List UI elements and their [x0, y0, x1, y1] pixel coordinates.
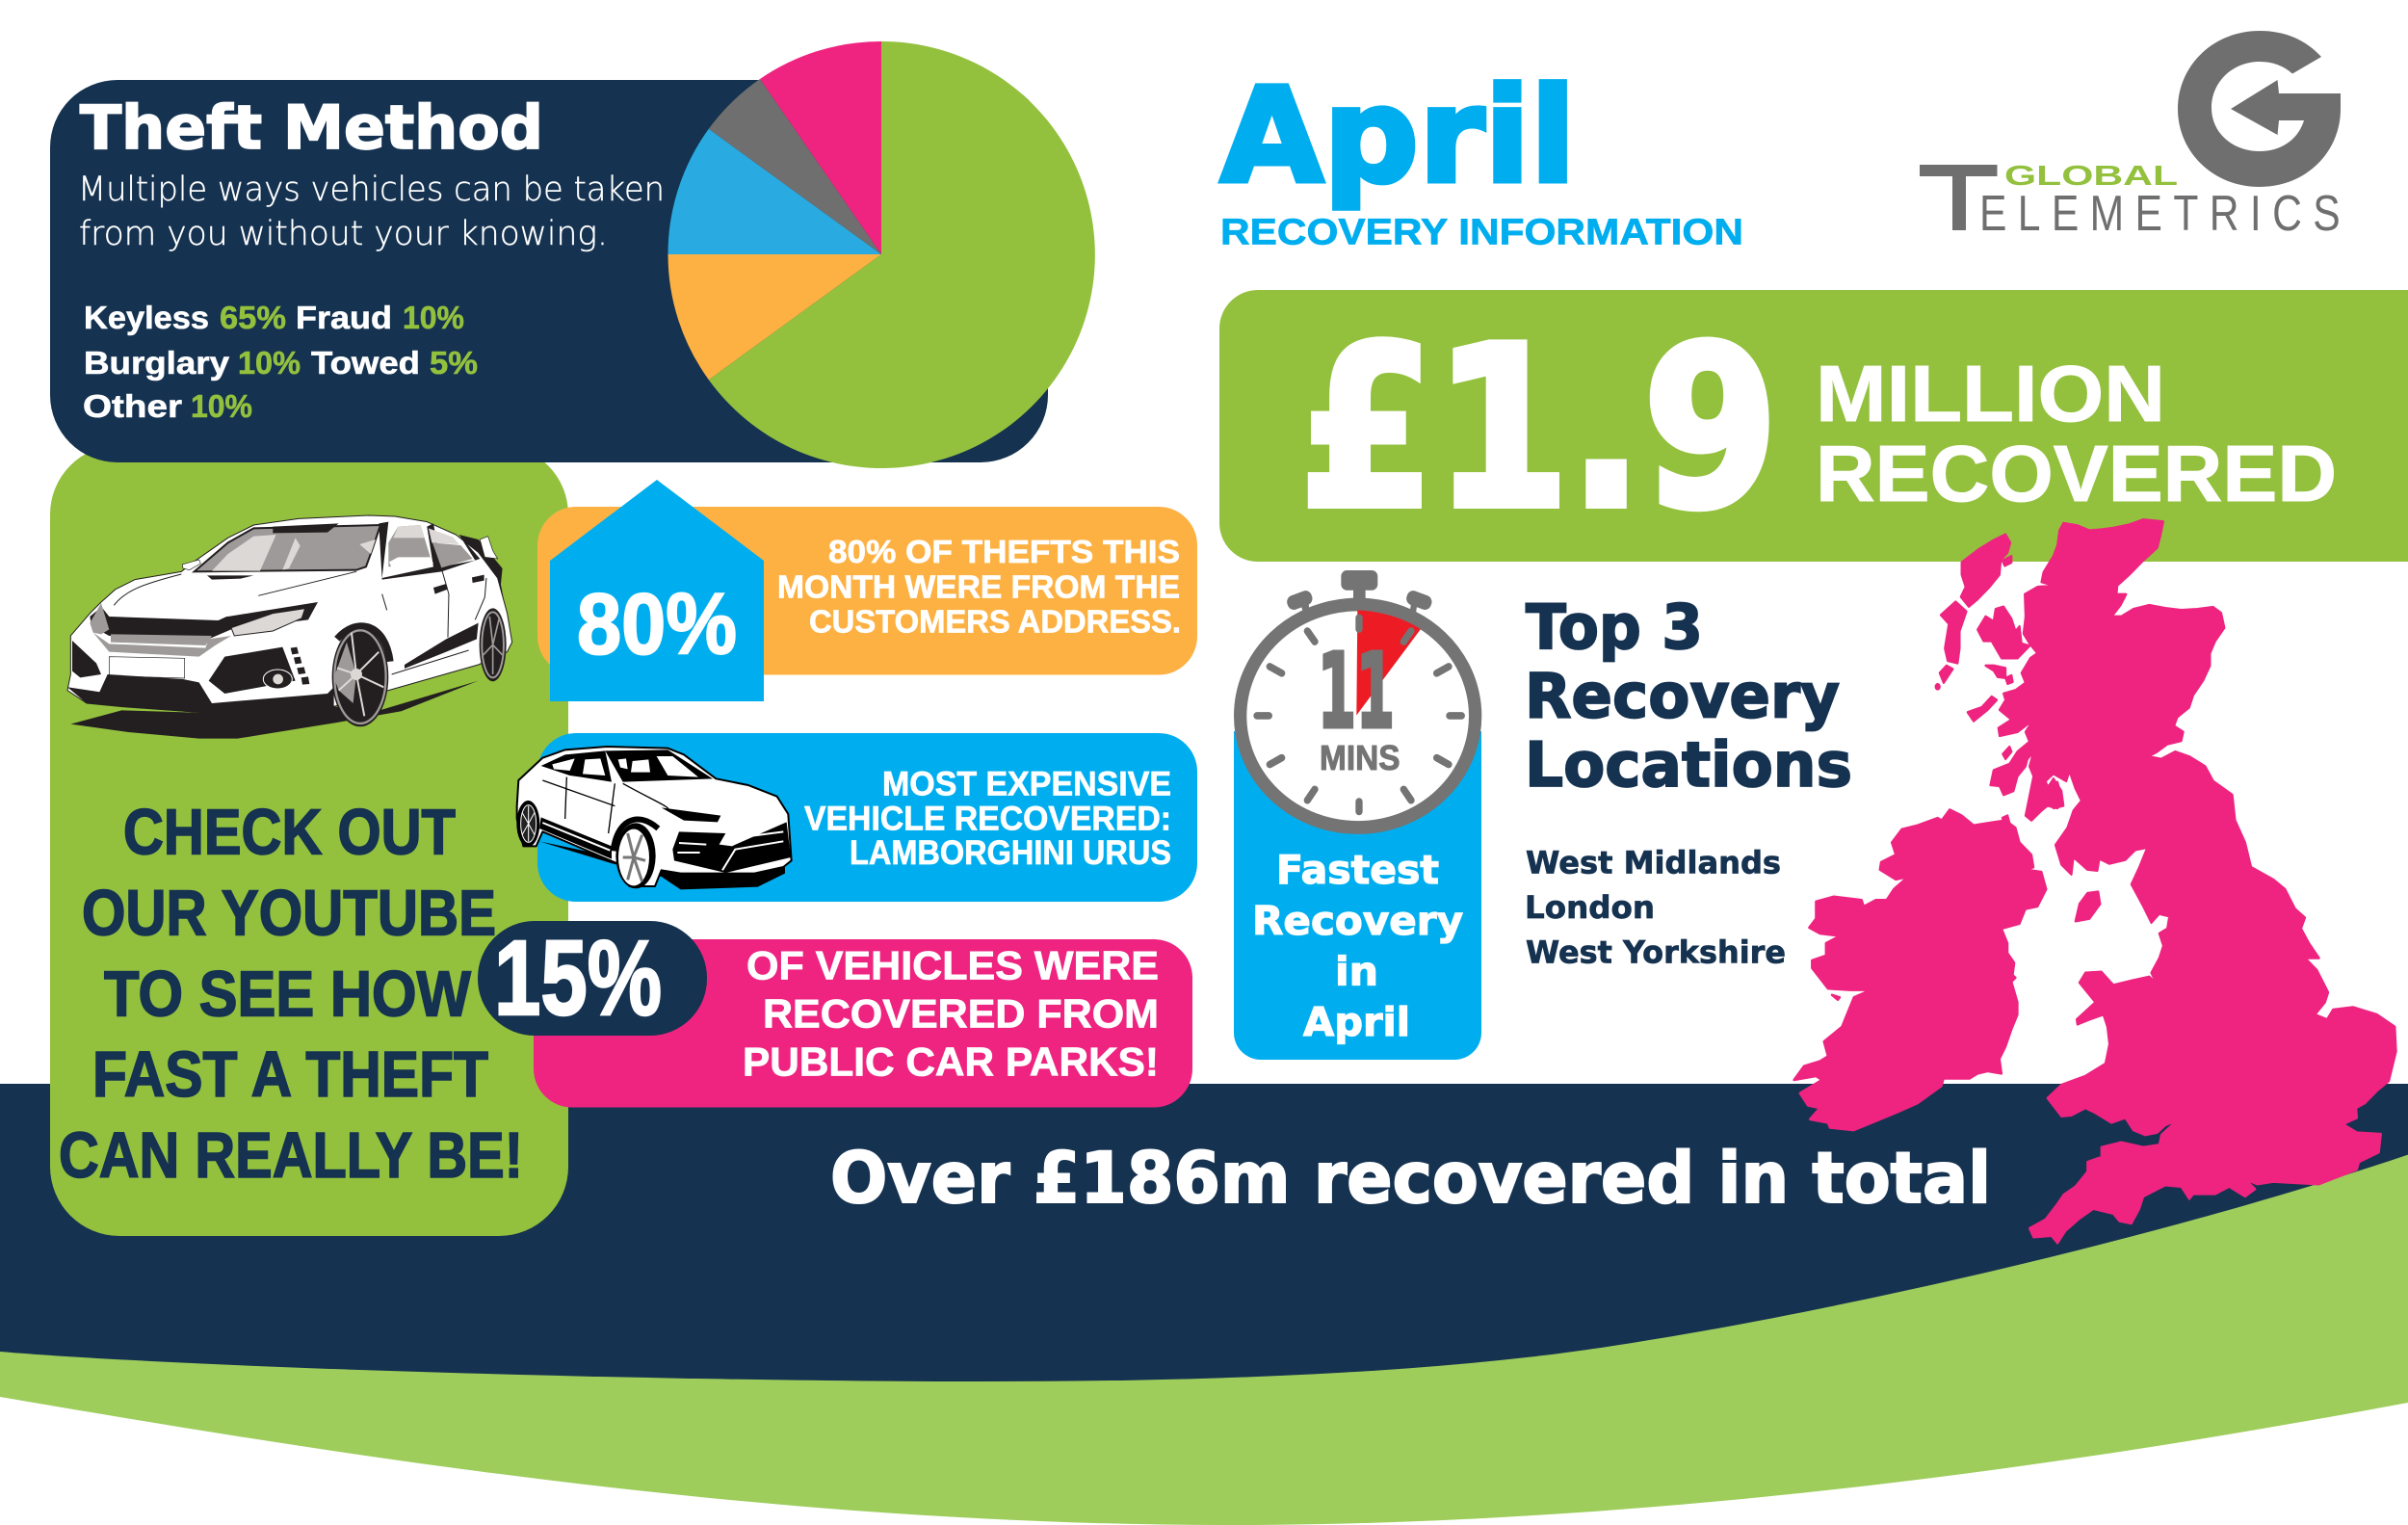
list: recovery locations: West Midlands [1526, 844, 1781, 881]
call to action text: FAST A THEFT [92, 1039, 488, 1111]
million recovered label: RECOVERED [1816, 429, 2337, 518]
subtitle: recovery information: RECOVERY INFORMATION [1220, 212, 1743, 252]
callout: total recovered: Over £186m recovered in total [830, 1138, 1991, 1220]
map: UK and Ireland [1793, 519, 2396, 1243]
logo big T [1920, 165, 1998, 230]
panel: fastest recovery [1234, 570, 1481, 1060]
legend of theft methods: Burglary [84, 345, 230, 381]
fastest recovery label: Recovery [1252, 898, 1463, 944]
address statistic text [777, 534, 1181, 640]
banner: £1.9 million recovered [1219, 290, 2408, 562]
address statistic text: 80% OF THEFTS THIS [828, 534, 1180, 569]
legend of theft methods: 65% [220, 300, 286, 335]
panel: YouTube call to action [50, 445, 568, 1236]
panel: public car parks [478, 919, 1192, 1108]
fastest recovery label: April [1303, 999, 1410, 1045]
address statistic text: CUSTOMERS ADDRESS. [809, 603, 1181, 640]
icon: house with 80% [550, 480, 764, 701]
illustration: white hatchback car [67, 515, 512, 739]
icon: house with 80%: 80% [577, 576, 737, 672]
logo: Global Telemetrics [1920, 31, 2341, 242]
description text [78, 171, 665, 253]
call to action text [59, 796, 523, 1192]
pie chart: theft methods [668, 41, 1095, 468]
car park statistic text: PUBLIC CAR PARKS! [743, 1039, 1159, 1085]
description text: from you without your knowing. [79, 215, 608, 253]
million recovered label [1816, 349, 2337, 518]
car park statistic text: OF VEHICLES WERE [746, 942, 1159, 988]
list: recovery locations: West Yorkshire [1526, 934, 1786, 971]
million recovered label: MILLION [1816, 349, 2165, 438]
car park statistic text: RECOVERED FROM [763, 990, 1159, 1037]
heading: top 3 recovery locations: Top 3 [1526, 592, 1703, 664]
stopwatch unit: MINS [1320, 738, 1400, 777]
list: recovery locations: London [1525, 889, 1655, 926]
legend of theft methods: 10% [403, 300, 464, 335]
legend of theft methods: Other [83, 388, 182, 424]
call to action text: CAN REALLY BE! [59, 1119, 523, 1192]
fastest recovery label: in [1335, 948, 1378, 994]
logo word GLOBAL: GLOBAL [2004, 161, 2178, 192]
legend of theft methods: 10% [238, 345, 301, 381]
call to action text: TO SEE HOW [104, 958, 472, 1031]
title: April: April [1220, 61, 1576, 213]
panel: 80% thefts from address [537, 480, 1197, 701]
panel: theft method [50, 80, 1048, 462]
logo word ELEMETRICS: ELEMETRICS [1979, 186, 2341, 242]
heading: top 3 recovery locations: Locations [1525, 730, 1852, 802]
legend of theft methods: Keyless [84, 300, 209, 335]
fastest recovery label [1252, 847, 1463, 1045]
logo G with arrow [2178, 31, 2341, 187]
call to action text: OUR YOUTUBE [82, 877, 496, 950]
illustration: Lamborghini Urus [516, 747, 792, 889]
call to action text: CHECK OUT [123, 796, 456, 869]
heading: top 3 recovery locations [1525, 592, 1852, 802]
car park statistic text [743, 942, 1159, 1085]
background: navy band [0, 1084, 2408, 1381]
badge: 15%: 15% [494, 919, 662, 1038]
panel: most expensive vehicle [537, 733, 1197, 902]
expensive vehicle text [804, 765, 1171, 872]
big number: £1.9 [1299, 301, 1778, 558]
fastest recovery label: Fastest [1276, 847, 1439, 893]
address statistic text: MONTH WERE FROM THE [777, 568, 1180, 605]
list: recovery locations [1525, 844, 1786, 971]
legend of theft methods: 10% [191, 388, 252, 424]
stopwatch number: 11 [1318, 632, 1395, 751]
icon: stopwatch [1241, 570, 1476, 828]
expensive vehicle text: MOST EXPENSIVE [882, 765, 1171, 803]
legend of theft methods [83, 300, 478, 424]
legend of theft methods: 5% [430, 345, 478, 381]
description text: Multiple ways vehicles can be taken [78, 171, 665, 209]
legend of theft methods: Towed [311, 345, 420, 381]
expensive vehicle text: VEHICLE RECOVERED: [804, 800, 1171, 838]
heading: theft method: Theft Method [80, 92, 543, 163]
legend of theft methods: Fraud [296, 300, 392, 335]
heading: top 3 recovery locations: Recovery [1525, 661, 1840, 732]
expensive vehicle text: LAMBORGHINI URUS [850, 834, 1171, 872]
background: light green wave [0, 1146, 2408, 1525]
